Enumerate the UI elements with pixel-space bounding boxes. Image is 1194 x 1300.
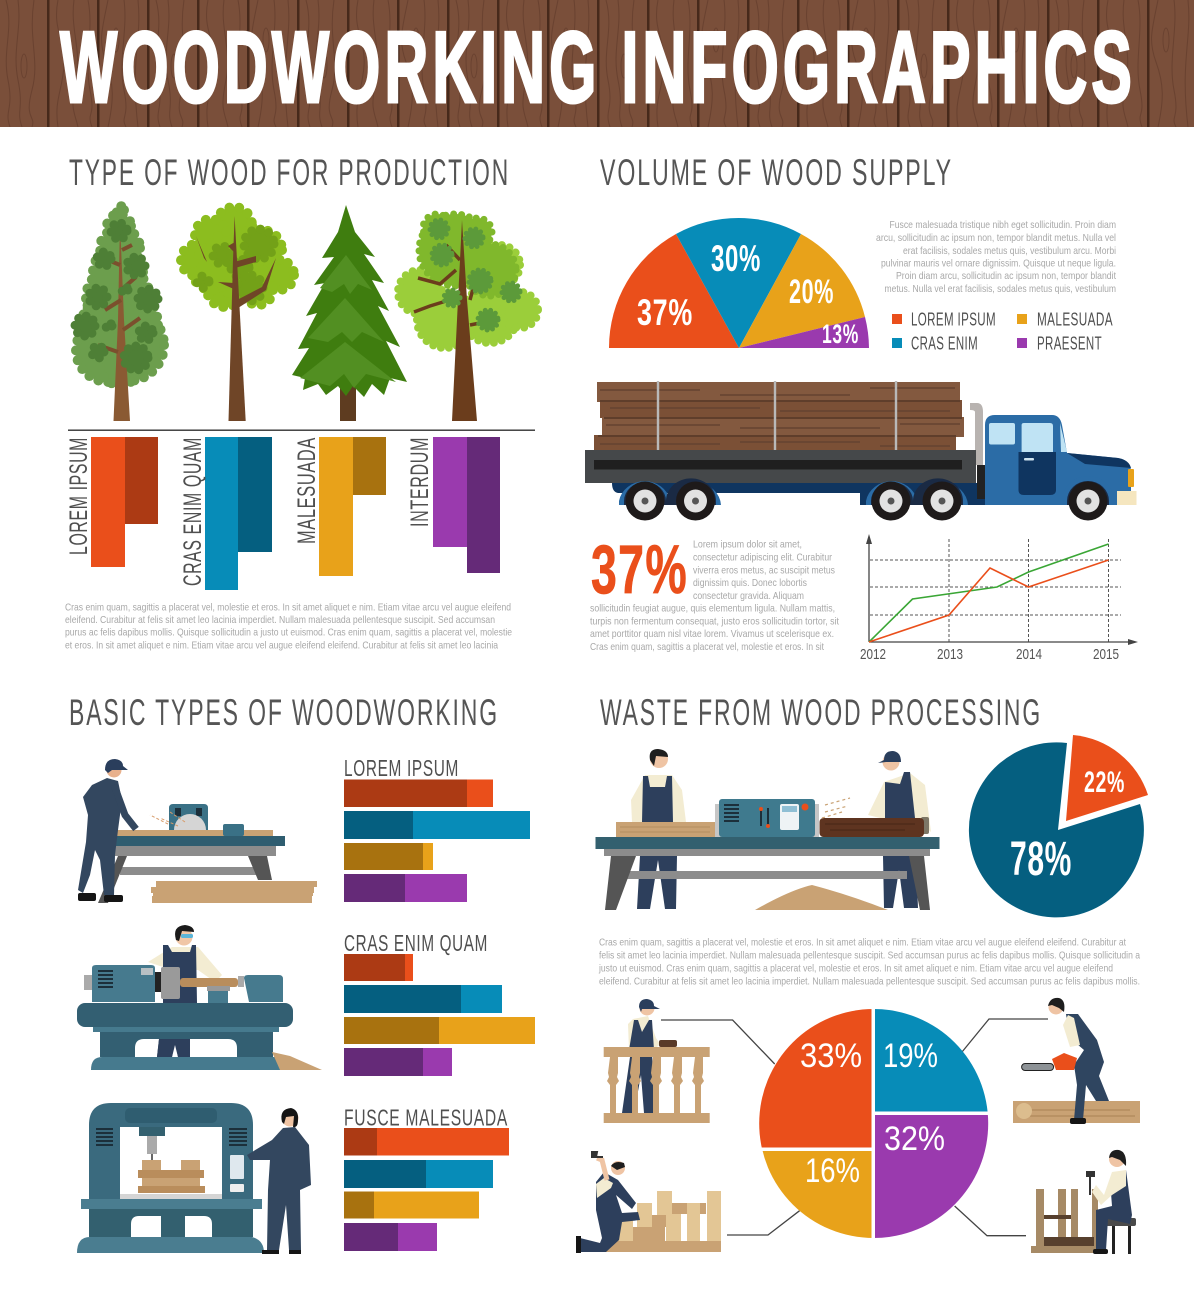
icon: carpenter with hammer, kneeling: [576, 1152, 721, 1253]
bar: cras enim quam: [179, 437, 272, 590]
panel: waste from wood processing: [576, 692, 1148, 1254]
bar: malesuada: [293, 437, 386, 576]
legend: MALESUADA: [1037, 308, 1113, 330]
line chart: 2015: [1093, 646, 1119, 663]
panel: type of wood for production: [65, 152, 538, 652]
connector lines: [661, 1019, 1048, 1236]
pie chart: quarters: 32%: [884, 1120, 945, 1158]
icon: tree 1: [75, 206, 164, 421]
text block: consectetur gravida. Aliquam: [693, 590, 804, 602]
legend: LOREM IPSUM: [911, 308, 996, 330]
bars: fusce malesuada: [344, 1104, 509, 1251]
pie chart: 78/22: [969, 735, 1148, 917]
big stat: 37%: [591, 531, 688, 608]
text block: et eros. In sit amet aliquet e nim. Etiam vitae arcu vel augue eleifend eleifend. Curabitur at felis sit amet leo lacinia: [65, 640, 498, 652]
bars: cras enim quam: [344, 930, 535, 1076]
bars: fusce malesuada: FUSCE MALESUADA: [344, 1104, 508, 1130]
line chart: [860, 534, 1138, 663]
text block: erat facilisis, sodales metus quis, vestibulum arcu. Morbi: [903, 245, 1116, 257]
bars: cras enim quam: CRAS ENIM QUAM: [344, 930, 488, 956]
bar: lorem ipsum: [65, 437, 158, 567]
icon: cnc machine with worker: [77, 1103, 311, 1254]
text block: pulvinar mauris vel ornare dignissim. Quisque ut neque ligula.: [881, 258, 1116, 270]
pie chart: quarters: 33%: [800, 1037, 862, 1075]
text block: purus ac felis dapibus mollis. Quisque sollicitudin a justo ut euismod. Cras enim quam, sagittis a placerat vel, molestie: [65, 626, 512, 638]
wheels: [619, 476, 1114, 520]
line chart: 2013: [937, 646, 963, 663]
half pie chart: [609, 218, 869, 349]
text block: Cras enim quam, sagittis a placerat vel, molestie et eros. In sit amet aliquet e nim. Etiam vitae arcu vel augue eleifend: [65, 602, 511, 614]
pie chart: 78/22: 78%: [1010, 833, 1072, 886]
worker: [78, 759, 136, 902]
text block: Lorem ipsum dolor sit amet,: [693, 538, 802, 550]
text block: [876, 219, 1116, 295]
ground line: [68, 430, 535, 431]
bars: lorem ipsum: [344, 755, 530, 902]
icon: saw table with worker: [78, 759, 317, 903]
text block: eleifend. Curabitur at felis sit amet leo lacinia imperdiet. Nullam malesuada pellentesque suscipit. Sed accumsan: [65, 614, 495, 626]
panel: basic types of woodworking: [69, 692, 535, 1254]
text block: amet porttitor quam nisl vitae lorem. Vivamus ut scelerisque ex.: [590, 628, 834, 640]
worker: [247, 1108, 311, 1254]
legend: PRAESENT: [1037, 332, 1102, 354]
bar: malesuada: MALESUADA: [293, 437, 321, 544]
text block: turpis non fermentum consequat, justo eros sollicitudin tortor, sit: [590, 616, 839, 628]
text block: sollicitudin feugiat augue, quis elementum ligula. Nullam mattis,: [590, 602, 835, 614]
icon: tree 4: [398, 214, 538, 421]
text block: Proin diam arcu, sollicitudin ac ipsum non, tempor blandit: [896, 270, 1116, 282]
worker: [148, 925, 222, 1057]
icon: lathe with worker: [77, 925, 322, 1070]
line chart: 2014: [1016, 646, 1042, 663]
trailer deck: [585, 450, 976, 483]
icon: fir tree: [292, 205, 407, 421]
logs: [594, 381, 964, 453]
icon: baluster worker: [604, 999, 710, 1123]
text block: viverra eros metus, ac suscipit metus: [693, 564, 835, 576]
right worker: [868, 751, 931, 908]
half pie chart: 20%: [789, 273, 834, 311]
bar: interdum: INTERDUM: [406, 437, 434, 527]
legend: CRAS ENIM: [911, 332, 978, 354]
cab: [985, 415, 1131, 505]
text block: arcu, sollicitudin ac ipsum non, tempor blandit metus. Nulla vel: [876, 232, 1116, 244]
pie chart: 78/22: 22%: [1084, 766, 1125, 799]
text block: Cras enim quam, sagittis a placerat vel, molestie et eros. In sit: [590, 641, 824, 653]
icon: chainsaw worker: [1013, 998, 1140, 1124]
left worker: [631, 749, 686, 909]
half pie chart: 37%: [637, 292, 693, 333]
half pie chart: 13%: [822, 319, 859, 349]
pie chart: quarters: 19%: [883, 1037, 938, 1075]
text block: [65, 602, 512, 652]
bars: lorem ipsum: LOREM IPSUM: [344, 755, 459, 781]
text block: dignissim quis. Donec lobortis: [693, 577, 807, 589]
panel: volume of wood supply: [585, 152, 1138, 663]
pie chart: quarters: [755, 1005, 991, 1241]
icon: tree 2: [181, 207, 294, 421]
heading: VOLUME OF WOOD SUPPLY: [600, 152, 953, 193]
bar: interdum: [406, 437, 500, 573]
heading: BASIC TYPES OF WOODWORKING: [69, 692, 499, 733]
icon: carpenter building stool: [1031, 1150, 1136, 1254]
heading: TYPE OF WOOD FOR PRODUCTION: [69, 152, 510, 193]
exhaust: [970, 403, 983, 465]
bar chart: wood types: [65, 437, 500, 590]
bar: lorem ipsum: LOREM IPSUM: [65, 437, 93, 555]
text block: consectetur adipiscing elit. Curabitur: [693, 552, 832, 564]
header banner: wood planks: [0, 0, 1194, 127]
pie chart: quarters: 16%: [805, 1152, 860, 1190]
chassis: [612, 483, 1120, 505]
text block: metus. Nulla vel erat facilisis, sodales metus quis, vestibulum: [884, 283, 1116, 295]
legend: [892, 308, 1113, 354]
bar: cras enim quam: CRAS ENIM QUAM: [179, 437, 207, 586]
text block: Fusce malesuada tristique nibh eget sollicitudin. Proin diam: [890, 219, 1116, 231]
text block: [590, 538, 839, 653]
line chart: 2012: [860, 646, 886, 663]
half pie chart: 30%: [711, 238, 761, 279]
icon: planer table with two workers: [596, 749, 940, 910]
text block: [598, 936, 1140, 988]
icon: logging truck: [585, 381, 1136, 520]
